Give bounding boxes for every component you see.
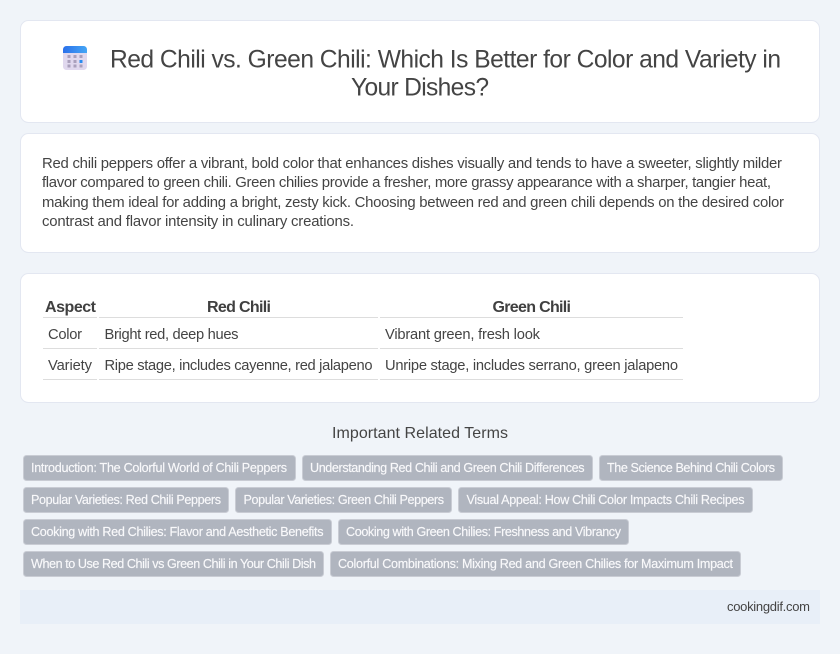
- related terms tags: Cooking with Red Chilies: Flavor and Aesthetic Benefits: [31, 525, 324, 539]
- table header row: Aspect: [45, 299, 97, 316]
- title: Your Dishes?: [351, 74, 489, 102]
- footer: [20, 590, 820, 624]
- related terms tags: Popular Varieties: Red Chili Peppers: [31, 493, 221, 507]
- panel: summary text: flavor compared to green chili. Green chilies provide a fresher, more grassy appearance with a sharper, tangier heat,: [42, 175, 771, 191]
- panel: summary text: making them ideal for adding a bright, zesty kick. Choosing between red and green chili depends on the desired color: [42, 195, 784, 211]
- table row: variety: Unripe stage, includes serrano, green jalapeno: [385, 358, 678, 374]
- related terms tags: Cooking with Green Chilies: Freshness and Vibrancy: [346, 525, 622, 539]
- related terms tags: Introduction: The Colorful World of Chili Peppers: [31, 461, 287, 475]
- related terms tags: Popular Varieties: Green Chili Peppers: [244, 493, 444, 507]
- table row: color: Bright red, deep hues: [104, 327, 238, 343]
- panel: summary text: [20, 134, 820, 252]
- footer: cookingdif.com: [727, 599, 810, 614]
- related terms tags: The Science Behind Chili Colors: [607, 461, 775, 475]
- table header row: Green Chili: [492, 299, 571, 316]
- table row: color: Vibrant green, fresh look: [385, 327, 541, 343]
- related terms tags: Colorful Combinations: Mixing Red and Green Chilies for Maximum Impact: [338, 557, 734, 571]
- panel: summary text: Red chili peppers offer a vibrant, bold color that enhances dishes visually and tends to have a sweeter, slightly milder: [42, 156, 782, 172]
- table header row: [43, 299, 683, 318]
- related terms tags: [24, 456, 782, 576]
- title: [110, 46, 781, 102]
- table row: variety: Variety: [48, 358, 93, 374]
- related terms tags: When to Use Red Chili vs Green Chili in Your Chili Dish: [31, 557, 316, 571]
- heading: related terms: Important Related Terms: [332, 425, 508, 442]
- panel: summary text: contrast and flavor intensity in culinary creations.: [42, 214, 354, 230]
- table row: variety: [43, 358, 683, 380]
- related terms tags: Visual Appeal: How Chili Color Impacts Chili Recipes: [466, 493, 744, 507]
- table row: color: Color: [48, 327, 82, 343]
- panel: header: [20, 20, 820, 122]
- table row: color: [43, 327, 683, 349]
- table row: variety: Ripe stage, includes cayenne, red jalapeno: [104, 358, 372, 374]
- icon: calendar: [63, 46, 87, 70]
- related terms tags: Understanding Red Chili and Green Chili Differences: [310, 461, 584, 475]
- panel: comparison table: [20, 274, 820, 402]
- table header row: Red Chili: [207, 299, 271, 316]
- title: Red Chili vs. Green Chili: Which Is Better for Color and Variety in: [110, 46, 781, 74]
